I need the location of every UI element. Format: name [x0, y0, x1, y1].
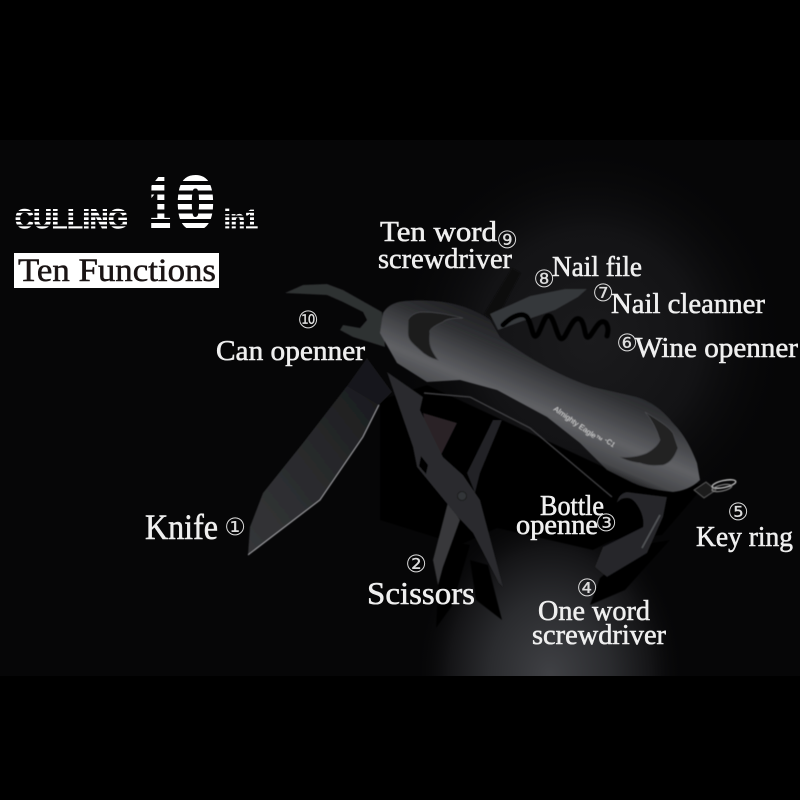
title word: in1: in1: [224, 204, 258, 234]
label 4: One word screwdriver: screwdriver: [532, 619, 666, 651]
tool: inner liner: [424, 393, 612, 497]
tool: corkscrew: [503, 315, 608, 339]
heading: Ten Functions: Ten Functions: [18, 253, 216, 289]
label 10: Can opener: ⑩: [297, 306, 319, 334]
label 8: Nail file: [533, 251, 642, 293]
label 3: Bottle opener: ③: [595, 509, 617, 537]
tool: ten word screwdriver: [484, 268, 521, 322]
brand engraving: Almighty Eagle™: [552, 404, 604, 445]
label 9: Ten word screwdriver: Ten word: [380, 216, 498, 248]
label 7: Nail cleaner: [592, 279, 765, 320]
tool: bottle opener and screwdriver: [595, 492, 667, 577]
title number: 0: 0: [178, 164, 213, 242]
label 5: Key ring: ⑤: [727, 498, 749, 526]
handle body: [380, 300, 700, 492]
label 1: Knife: ①: [224, 513, 246, 541]
label 4: One word screwdriver: [532, 574, 666, 651]
tool: nail file: [490, 289, 587, 330]
label 7: Nail cleaner: Nail cleanner: [611, 288, 765, 320]
label 3: Bottle opener: Bottle: [540, 491, 604, 522]
label 4: One word screwdriver: One word: [538, 595, 650, 627]
label 6: Wine opener: ⑥: [616, 329, 638, 357]
title word: Culling: CULLING: [15, 204, 128, 234]
label 9: Ten word screwdriver: [378, 216, 518, 275]
handle crescent left: [408, 312, 463, 360]
label 8: Nail file: Nail file: [552, 251, 642, 283]
label 5: Key ring: [696, 498, 793, 553]
label 4: One word screwdriver: ④: [576, 574, 598, 602]
label 9: Ten word screwdriver: screwdriver: [378, 243, 512, 275]
key ring: [694, 478, 736, 498]
label 3: Bottle opener: [516, 491, 617, 541]
label 7: Nail cleaner: ⑦: [592, 279, 614, 307]
tool: can opener: [285, 284, 385, 347]
label 9: Ten word screwdriver: ⑨: [496, 226, 518, 254]
illustration: multi-function pocket knife: [248, 268, 736, 587]
tool: knife blade: [248, 358, 392, 555]
label 1: Knife: Knife: [145, 507, 218, 547]
label 6: Wine opener: Wine openner: [635, 332, 798, 364]
title: Culling 10 in 1: [10, 164, 262, 242]
label 2: Scissors: [367, 550, 475, 611]
label 3: Bottle opener: openne: [516, 510, 598, 541]
label 5: Key ring: Key ring: [696, 521, 793, 553]
label 10: Can opener: Can openner: [216, 335, 365, 367]
title number: 1: 1: [150, 164, 170, 242]
label 2: Scissors: ②: [405, 550, 427, 578]
label 10: Can opener: [216, 306, 365, 367]
tool: scissors: [387, 372, 503, 587]
handle crescent right: [620, 412, 678, 466]
label 2: Scissors: Scissors: [367, 575, 475, 611]
illustration: multi-function pocket knife: -C1: [603, 437, 616, 449]
label 8: Nail file: ⑧: [533, 265, 555, 293]
